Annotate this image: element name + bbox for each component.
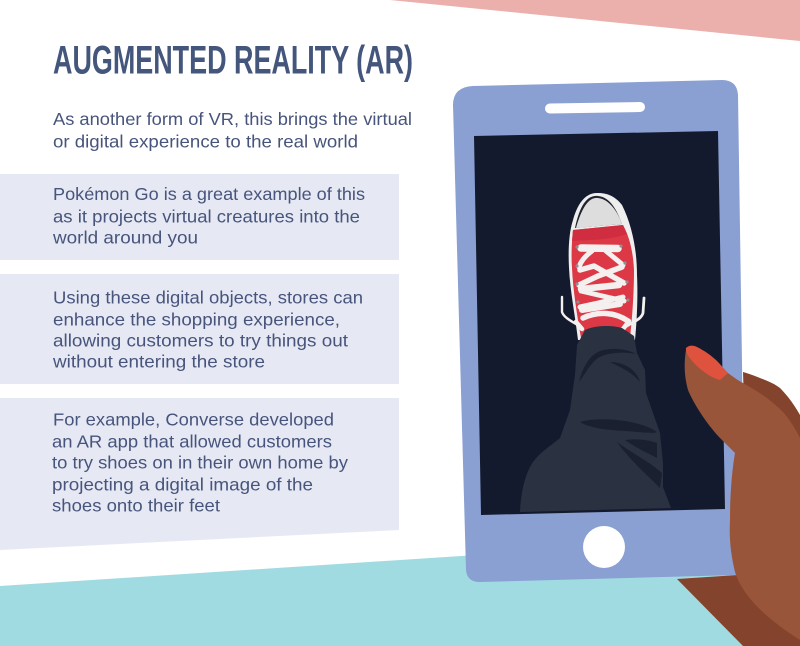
panel text: Converse example — [52, 409, 348, 515]
home button — [583, 526, 625, 568]
panel text: Converse example: to try shoes on in their own home by — [52, 452, 348, 472]
panel text: Converse example: shoes onto their feet — [52, 495, 220, 515]
panel: Pokémon Go — [0, 174, 399, 260]
background: pink corner shape — [390, 0, 800, 41]
panel text: digital objects in stores: allowing customers to try things out — [53, 330, 348, 350]
phone — [453, 80, 745, 582]
sneaker toe cap — [576, 198, 622, 228]
sneaker toe liner — [575, 196, 622, 228]
intro text: As another form of VR, this brings the virtual — [53, 109, 412, 129]
sneaker red band — [572, 225, 627, 241]
panel text: digital objects in stores: without entering the store — [52, 351, 265, 371]
background: teal floor shape — [0, 534, 800, 646]
panel text: digital objects in stores — [52, 287, 363, 371]
fingernail — [686, 346, 728, 380]
panel text: Pokémon Go — [52, 184, 365, 247]
panel text: Pokémon Go: Pokémon Go is a great example of this — [53, 184, 365, 204]
sneaker laces — [562, 248, 644, 329]
panel: Converse example — [0, 398, 399, 550]
phone speaker — [550, 107, 640, 108]
sneaker outline — [569, 193, 637, 340]
panel text: Pokémon Go: as it projects virtual creatures into the — [53, 206, 360, 226]
panel text: Converse example: projecting a digital image of the — [52, 474, 313, 494]
sneaker red upper — [572, 225, 634, 338]
phone screen — [474, 131, 725, 515]
jeans leg — [520, 326, 671, 512]
intro text: or digital experience to the real world — [53, 131, 358, 151]
back of hand shadow — [677, 372, 800, 646]
panel text: Converse example: an AR app that allowed customers — [52, 431, 332, 451]
title: AUGMENTED REALITY (AR) — [53, 38, 413, 82]
intro text — [53, 109, 412, 151]
panel text: digital objects in stores: enhance the shopping experience, — [53, 309, 340, 329]
panel text: Pokémon Go: world around you — [52, 227, 198, 247]
finger and palm — [685, 350, 800, 640]
panel text: digital objects in stores: Using these digital objects, stores can — [53, 287, 363, 307]
jeans fold shadows — [579, 349, 662, 488]
lace eyelets — [575, 244, 630, 304]
panel: digital objects in stores — [0, 274, 399, 384]
sneaker — [562, 193, 644, 340]
phone body — [453, 80, 745, 582]
panel text: Converse example: For example, Converse developed — [53, 409, 334, 429]
hand — [677, 346, 800, 646]
